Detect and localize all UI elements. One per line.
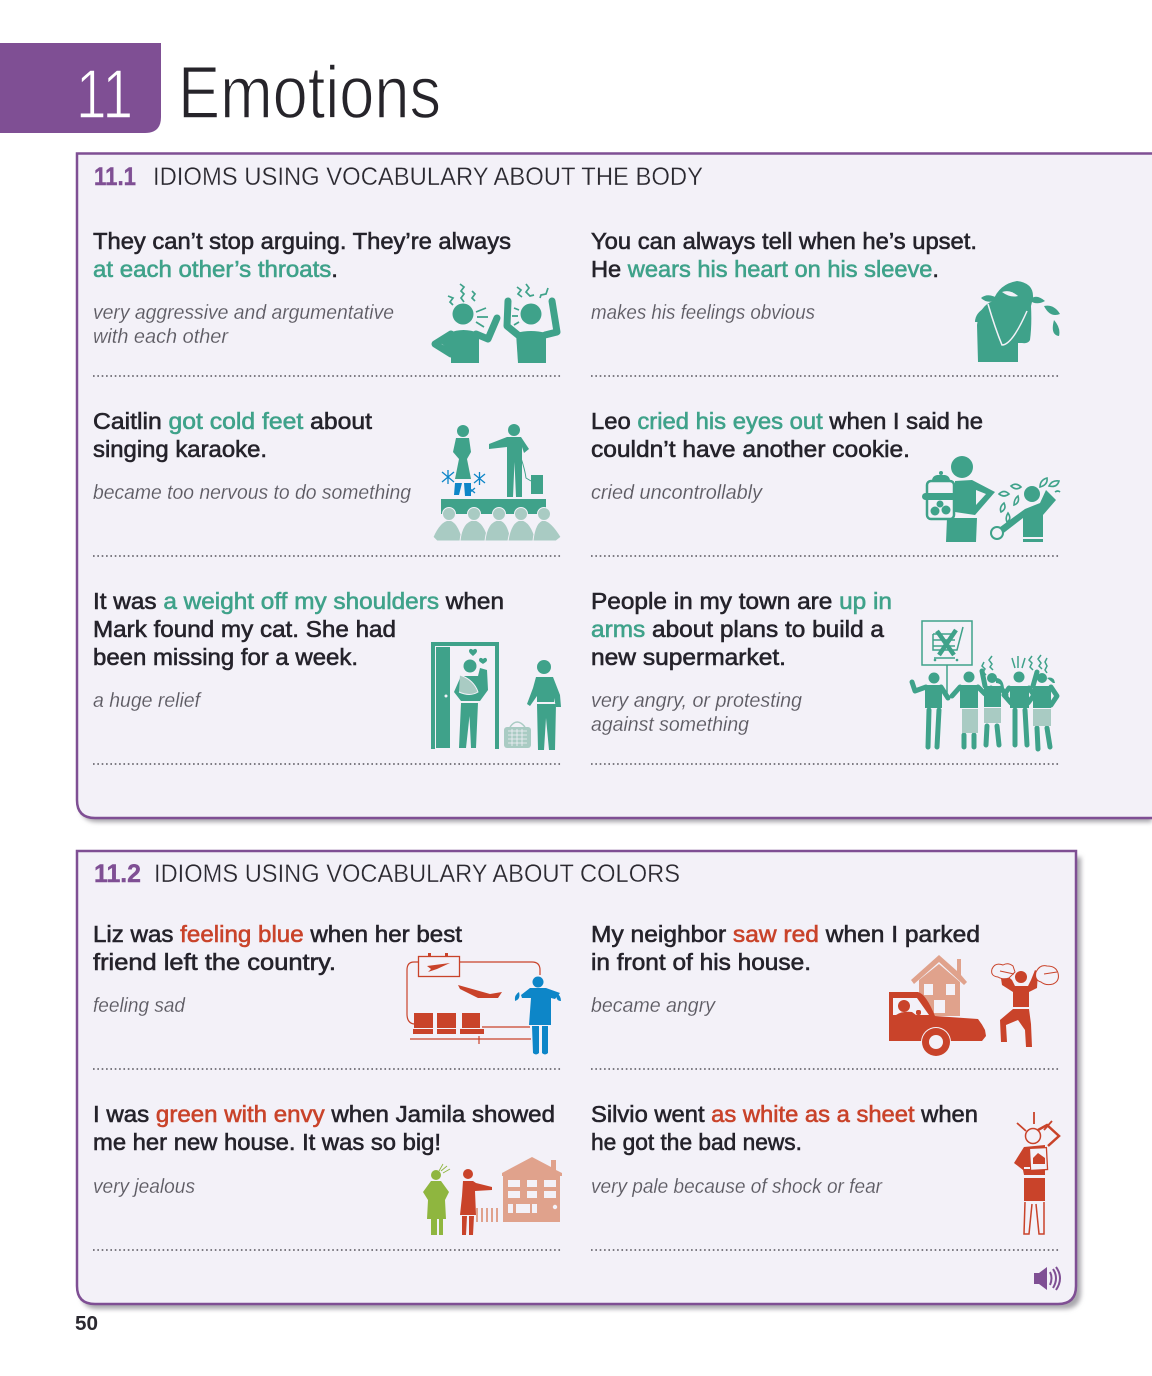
idiom: up in arms: very angry, or protesting xyxy=(591,690,802,712)
idiom: as white as a sheet: he got the bad news. xyxy=(591,1129,802,1155)
idiom: wears his heart on his sleeve: He wears his heart on his sleeve. xyxy=(591,256,939,282)
icon: jealous woman and new house xyxy=(423,1157,562,1235)
idiom: saw red: became angry xyxy=(591,995,716,1017)
heading 11.2: 11.2 xyxy=(94,860,141,888)
idiom: cried his eyes out: cried uncontrollably xyxy=(591,482,763,504)
idiom: feeling blue: Liz was feeling blue when her best xyxy=(93,921,462,947)
idiom: feeling blue: friend left the country. xyxy=(93,949,336,975)
icon: nervous singer on stage xyxy=(433,424,561,541)
idiom: green with envy xyxy=(93,1101,555,1198)
idiom: got cold feet: became too nervous to do something xyxy=(93,482,411,504)
chapter number tab xyxy=(0,43,161,133)
idiom: up in arms: arms about plans to build a xyxy=(591,616,885,642)
icon: child crying by cookie jar xyxy=(922,456,1060,542)
dotted divider xyxy=(93,376,1059,764)
icon: speaker audio xyxy=(1034,1267,1060,1290)
idiom: at each other's throats: with each other xyxy=(93,326,229,348)
idiom: up in arms: People in my town are up in xyxy=(591,588,892,614)
icon: person at door hugging cat xyxy=(431,642,561,750)
icon: protesters with sign xyxy=(912,621,1057,749)
idiom: at each other's throats: They can’t stop arguing. They’re always xyxy=(93,228,511,254)
heading 11.2: IDIOMS USING VOCABULARY ABOUT COLORS xyxy=(154,860,680,888)
chapter title: Emotions xyxy=(178,51,441,134)
idiom: as white as a sheet: Silvio went as white as a sheet when xyxy=(591,1101,978,1127)
idiom: green with envy: I was green with envy when Jamila showed xyxy=(93,1101,555,1127)
idiom: feeling blue: feeling sad xyxy=(93,995,186,1017)
page number: 50 xyxy=(75,1313,98,1335)
idiom: as white as a sheet: very pale because of shock or fear xyxy=(591,1176,883,1198)
icon: two people arguing xyxy=(435,284,557,363)
icon: woman crying at airport xyxy=(407,953,561,1054)
idiom: saw red: in front of his house. xyxy=(591,949,811,975)
icon: person crying into sleeve xyxy=(975,281,1060,362)
idiom: cried his eyes out: couldn’t have another cookie. xyxy=(591,436,910,462)
idiom: saw red: My neighbor saw red when I parked xyxy=(591,921,980,947)
idiom: a weight off my shoulders: It was a weight off my shoulders when xyxy=(93,588,504,614)
idiom: saw red xyxy=(591,921,980,1017)
idiom: up in arms: against something xyxy=(591,714,749,736)
idiom: a weight off my shoulders: a huge relief xyxy=(93,690,202,712)
idiom: got cold feet xyxy=(93,408,411,504)
dotted divider xyxy=(93,1069,1059,1250)
idiom: as white as a sheet xyxy=(591,1101,978,1198)
idiom: wears his heart on his sleeve: makes his feelings obvious xyxy=(591,302,815,324)
idiom: got cold feet: singing karaoke. xyxy=(93,436,267,462)
idiom: a weight off my shoulders: Mark found my cat. She had xyxy=(93,616,396,642)
idiom: got cold feet: Caitlin got cold feet about xyxy=(93,408,372,434)
idiom: up in arms xyxy=(591,588,892,736)
idiom: wears his heart on his sleeve: You can always tell when he’s upset. xyxy=(591,228,977,254)
idiom: up in arms: new supermarket. xyxy=(591,644,786,670)
idiom: at each other's throats: very aggressive and argumentative xyxy=(93,302,394,324)
idiom: at each other's throats: at each other’s throats. xyxy=(93,256,338,282)
heading 11.1: 11.1 xyxy=(94,163,136,191)
idiom: green with envy: me her new house. It was so big! xyxy=(93,1129,441,1155)
heading 11.1: IDIOMS USING VOCABULARY ABOUT THE BODY xyxy=(153,163,703,191)
idiom: cried his eyes out xyxy=(591,408,983,504)
idiom: a weight off my shoulders: been missing for a week. xyxy=(93,644,358,670)
idiom: green with envy: very jealous xyxy=(93,1176,195,1198)
panel: 11.2 idioms about colors xyxy=(77,851,1081,1309)
chapter number tab: 11 xyxy=(76,55,133,133)
idiom: cried his eyes out: Leo cried his eyes out when I said he xyxy=(591,408,983,434)
icon: angry man and parked car xyxy=(889,955,1058,1057)
idiom: a weight off my shoulders xyxy=(93,588,504,712)
panel: 11.1 idioms about the body xyxy=(77,154,1152,822)
idiom: feeling blue xyxy=(93,921,462,1017)
idiom: at each other's throats xyxy=(93,228,511,348)
idiom: wears his heart on his sleeve xyxy=(591,228,977,324)
icon: shocked man holding letter xyxy=(1014,1112,1059,1234)
